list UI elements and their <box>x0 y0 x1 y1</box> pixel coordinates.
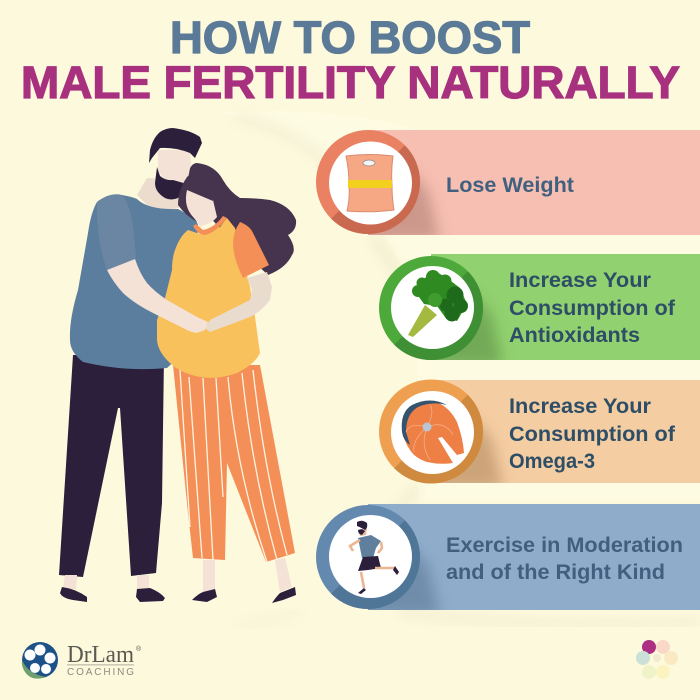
label <box>509 269 676 347</box>
woman's collar <box>193 216 227 235</box>
man's beard <box>155 167 188 200</box>
banner <box>431 380 700 483</box>
trouser stripes <box>180 370 287 562</box>
logo: DrLam Coaching <box>22 642 142 679</box>
label: Lose Weight <box>446 174 574 197</box>
tagline: COACHING <box>67 667 134 678</box>
panel: antioxidants <box>379 254 700 365</box>
label: Exercise in Moderation <box>446 534 683 557</box>
label: Consumption of <box>509 297 676 320</box>
man's shirt <box>70 195 198 369</box>
panel: omega-3 <box>379 380 700 488</box>
circle shadow <box>440 420 506 483</box>
badge ring <box>379 380 483 484</box>
label: Consumption of <box>509 423 676 446</box>
label: and of the Right Kind <box>446 561 665 584</box>
label: Increase Your <box>509 395 651 418</box>
label: Increase Your <box>509 269 651 292</box>
woman's face <box>183 188 217 227</box>
man's shirt sleeve shading <box>97 194 136 270</box>
icon: flower mark <box>636 640 678 679</box>
man's neck <box>137 178 190 210</box>
logo: DrLam Coaching: ® <box>136 645 142 653</box>
wordmark: DrLam <box>67 642 134 668</box>
badge ring <box>316 505 420 609</box>
man's hair <box>149 128 202 163</box>
man's shoes <box>60 587 165 602</box>
woman's top <box>157 218 260 378</box>
circle shadow <box>368 550 442 610</box>
badge ring <box>316 130 420 234</box>
man's ankles <box>63 575 149 590</box>
circle shadow <box>368 173 443 235</box>
woman's shoes <box>192 587 296 603</box>
banner <box>431 254 700 360</box>
background arc <box>215 110 700 626</box>
icon: salmon steak <box>402 400 464 464</box>
man's trousers <box>59 355 164 577</box>
icon: runner <box>350 521 399 594</box>
man's arm <box>107 259 208 333</box>
woman's hair <box>187 163 296 275</box>
label: Antioxidants <box>509 324 640 347</box>
woman's ankles <box>203 558 292 592</box>
panel: lose weight <box>316 130 700 240</box>
woman's hair front <box>178 171 213 222</box>
circle shadow <box>436 297 506 360</box>
man's head <box>158 150 191 190</box>
label: Omega-3 <box>509 450 595 473</box>
banner <box>368 130 700 235</box>
woman's arm <box>205 272 272 332</box>
icon: broccoli <box>408 270 468 337</box>
icon: flower <box>22 642 58 679</box>
title: HOW TO BOOST <box>170 12 530 63</box>
woman's trousers <box>173 365 295 562</box>
title: MALE FERTILITY NATURALLY <box>21 57 680 108</box>
banner <box>368 504 700 610</box>
title <box>21 12 680 108</box>
badge ring <box>379 256 483 360</box>
woman's sleeve <box>233 222 269 278</box>
panel: exercise <box>316 504 700 615</box>
illustration: couple <box>59 128 296 603</box>
icon: scale with tape <box>346 154 394 212</box>
label <box>509 395 676 473</box>
label <box>446 534 683 584</box>
